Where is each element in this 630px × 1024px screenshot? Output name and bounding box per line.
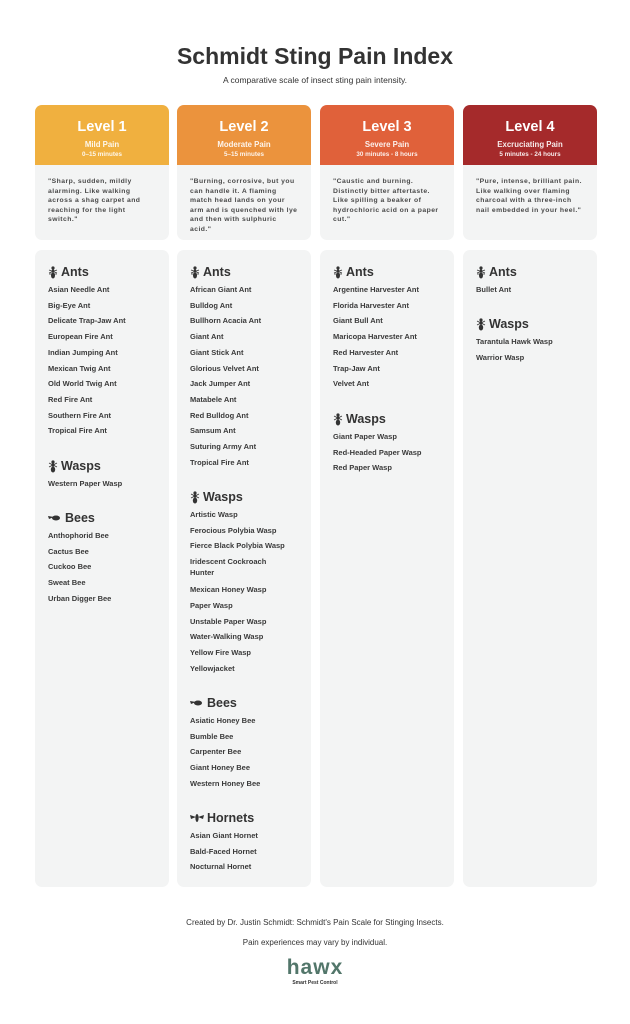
section: wasps: Yellowjacket <box>190 664 235 673</box>
section: bees: Cuckoo Bee <box>48 562 91 571</box>
section: wasps: Yellow Fire Wasp <box>190 648 251 657</box>
section: ants: Indian Jumping Ant <box>48 348 118 357</box>
section: ants: Giant Stick Ant <box>190 348 243 357</box>
section: bees: Bees <box>207 696 237 710</box>
section: wasps <box>190 490 285 673</box>
section: ants: Ants <box>61 265 89 279</box>
section: hornets: Hornets <box>207 811 254 825</box>
section: bees <box>190 696 260 788</box>
section: ants: Giant Bull Ant <box>333 316 383 325</box>
section: bees: Cactus Bee <box>48 547 89 556</box>
section: ants: Ants <box>203 265 231 279</box>
section: ants: Giant Ant <box>190 332 223 341</box>
subtitle: A comparative scale of insect sting pain intensity. <box>223 75 407 85</box>
section: ants: Suturing Army Ant <box>190 442 256 451</box>
panel: level 2 header: 5–15 minutes <box>224 151 264 158</box>
panel: level 1 header: Level 1 <box>77 119 127 135</box>
section: hornets <box>190 811 258 871</box>
panel: level 4 list <box>463 250 597 887</box>
section: wasps: Hunter <box>190 568 214 577</box>
panel: level 3 header <box>320 105 454 240</box>
section: ants: Florida Harvester Ant <box>333 301 409 310</box>
panel: level 3 header: 30 minutes - 8 hours <box>356 151 418 158</box>
section: wasps: Paper Wasp <box>190 601 233 610</box>
section: wasps: Mexican Honey Wasp <box>190 585 266 594</box>
section: ants: European Fire Ant <box>48 332 113 341</box>
section: ants: Ants <box>489 265 517 279</box>
section: ants: Red Bulldog Ant <box>190 411 248 420</box>
section: wasps: Giant Paper Wasp <box>333 432 397 441</box>
section: ants <box>48 265 126 435</box>
section: bees: Asiatic Honey Bee <box>190 716 255 725</box>
panel: level 1 header: 0–15 minutes <box>82 151 122 158</box>
panel: level 2 header <box>177 105 311 240</box>
panel: level 2 header: Level 2 <box>219 119 269 135</box>
panel: level 1 list <box>35 250 169 887</box>
panel: level 1 header: Mild Pain <box>85 140 119 149</box>
panel: level 2 list <box>177 250 311 887</box>
panel: level 3 list <box>320 250 454 887</box>
panel: level 4 header: Excruciating Pain <box>497 140 563 149</box>
section: wasps: Unstable Paper Wasp <box>190 617 266 626</box>
section: ants: African Giant Ant <box>190 285 251 294</box>
section: wasps: Fierce Black Polybia Wasp <box>190 541 285 550</box>
section: hornets: Nocturnal Hornet <box>190 862 251 871</box>
panel: level 4 header: Level 4 <box>505 119 555 135</box>
section: wasps <box>48 459 122 488</box>
panel: level 1 header: "Sharp, sudden, mildly alarming. Like walking across a shag carpet and reaching for the light switch." <box>48 178 140 223</box>
section: ants: Bullet Ant <box>476 285 511 294</box>
section: bees: Sweat Bee <box>48 578 86 587</box>
section: wasps: Western Paper Wasp <box>48 479 122 488</box>
footer credit: Created by Dr. Justin Schmidt: Schmidt's Pain Scale for Stinging Insects. <box>186 918 444 927</box>
section: wasps: Warrior Wasp <box>476 353 524 362</box>
section: wasps: Artistic Wasp <box>190 510 238 519</box>
section: ants: Jack Jumper Ant <box>190 379 250 388</box>
section: wasps: Wasps <box>346 412 386 426</box>
section: ants: Bullhorn Acacia Ant <box>190 316 261 325</box>
section: wasps: Red Paper Wasp <box>333 463 392 472</box>
section: ants: Samsum Ant <box>190 426 236 435</box>
section: ants: Asian Needle Ant <box>48 285 109 294</box>
logo: Smart Pest Control <box>292 980 338 986</box>
panel: level 4 header <box>463 105 597 240</box>
panel: level 3 header: Level 3 <box>362 119 412 135</box>
section: ants: Trap-Jaw Ant <box>333 364 380 373</box>
panel: level 4 header: "Pure, intense, brilliant pain. Like walking over flaming charcoal with a three-inch nail embedded in your heel." <box>476 178 582 214</box>
section: ants: Tropical Fire Ant <box>48 426 107 435</box>
section: bees <box>48 511 111 603</box>
section: ants: Velvet Ant <box>333 379 369 388</box>
section: ants <box>476 265 517 294</box>
section: ants: Maricopa Harvester Ant <box>333 332 417 341</box>
section: bees: Anthophorid Bee <box>48 531 109 540</box>
section: bees: Bees <box>65 511 95 525</box>
section: ants <box>190 265 262 467</box>
section: ants: Red Fire Ant <box>48 395 92 404</box>
section: bees: Giant Honey Bee <box>190 763 250 772</box>
section: bees: Bumble Bee <box>190 732 233 741</box>
section: wasps: Iridescent Cockroach <box>190 557 266 566</box>
section: ants: Bulldog Ant <box>190 301 232 310</box>
section: bees: Western Honey Bee <box>190 779 260 788</box>
section: bees: Carpenter Bee <box>190 747 241 756</box>
section: hornets: Bald-Faced Hornet <box>190 847 257 856</box>
section: wasps: Wasps <box>61 459 101 473</box>
section: ants: Ants <box>346 265 374 279</box>
section: wasps: Red-Headed Paper Wasp <box>333 448 422 457</box>
section: ants <box>333 265 419 388</box>
panel: level 1 header <box>35 105 169 240</box>
section: ants: Tropical Fire Ant <box>190 458 249 467</box>
panel: level 2 header: Moderate Pain <box>217 140 271 149</box>
section: ants: Argentine Harvester Ant <box>333 285 419 294</box>
panel: level 4 header: 5 minutes - 24 hours <box>499 151 561 158</box>
section: bees: Urban Digger Bee <box>48 594 111 603</box>
footer note: Pain experiences may vary by individual. <box>243 938 387 947</box>
section: ants: Matabele Ant <box>190 395 236 404</box>
section: ants: Old World Twig Ant <box>48 379 117 388</box>
section: ants: Red Harvester Ant <box>333 348 398 357</box>
section: ants: Delicate Trap-Jaw Ant <box>48 316 126 325</box>
section: wasps: Ferocious Polybia Wasp <box>190 526 276 535</box>
title: Schmidt Sting Pain Index <box>177 43 453 69</box>
panel: level 2 header: "Burning, corrosive, but you can handle it. A flaming match head lands on your arm and is quenched with lye and then with sulphuric acid." <box>190 178 297 232</box>
section: wasps <box>476 317 553 362</box>
section: ants: Big-Eye Ant <box>48 301 90 310</box>
section: wasps: Wasps <box>203 490 243 504</box>
section: ants: Southern Fire Ant <box>48 411 111 420</box>
logo: hawx <box>287 956 343 979</box>
panel: level 3 header: Severe Pain <box>365 140 409 149</box>
section: wasps <box>333 412 422 472</box>
section: ants: Glorious Velvet Ant <box>190 364 259 373</box>
section: wasps: Tarantula Hawk Wasp <box>476 337 553 346</box>
section: wasps: Water-Walking Wasp <box>190 632 263 641</box>
panel: level 3 header: "Caustic and burning. Distinctly bitter aftertaste. Like spilling a beaker of hydrochloric acid on a paper cut." <box>333 178 439 223</box>
section: wasps: Wasps <box>489 317 529 331</box>
section: ants: Mexican Twig Ant <box>48 364 111 373</box>
section: hornets: Asian Giant Hornet <box>190 831 258 840</box>
